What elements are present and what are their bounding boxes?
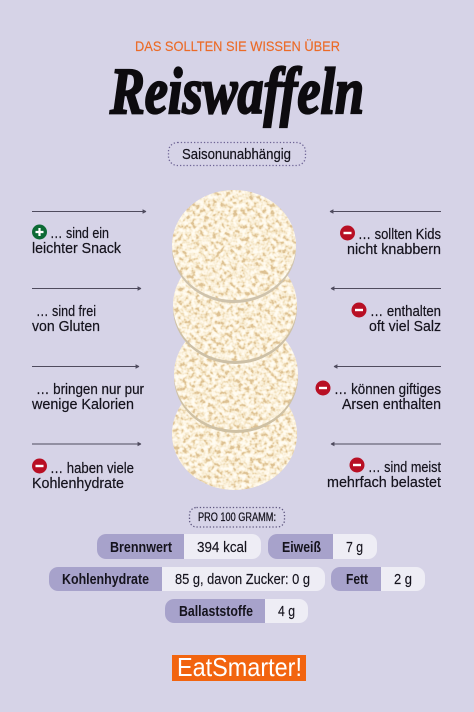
icon: minus [316, 380, 330, 396]
nutrition: Fett: 2 g [394, 571, 412, 588]
nutrition: Kohlenhydrate: 85 g, davon Zucker: 0 g [175, 571, 310, 588]
benefit: gluten free: von Gluten [32, 318, 100, 335]
logo: EatSmarter: EatSmarter! [177, 652, 302, 682]
arrow left 3 [32, 365, 139, 368]
benefit: few calories [31, 381, 144, 413]
drawback: arsenic: … können giftiges [334, 381, 441, 398]
benefit: few calories: … bringen nur pur [36, 381, 144, 398]
rice cake 4 [172, 404, 297, 490]
arrow right 4 [331, 442, 441, 446]
title: Reiswaffeln [109, 55, 364, 128]
drawback: salt [352, 302, 441, 335]
nutrition: Brennwert: Brennwert [110, 540, 172, 556]
nutrition: Eiweiß: 7 g [346, 539, 363, 556]
benefit: light snack: leichter Snack [32, 240, 121, 257]
kicker: DAS SOLLTEN SIE WISSEN ÜBER [135, 37, 340, 54]
drawback: salt: oft viel Salz [369, 318, 441, 335]
icon: minus [350, 458, 364, 472]
rice cake 3 [174, 340, 298, 433]
nutrition: Fett [331, 567, 425, 591]
badge: per 100 gram: PRO 100 GRAMM: [198, 512, 276, 524]
rice cake 1 [170, 188, 298, 303]
drawback: contaminated: mehrfach belastet [327, 474, 442, 491]
illustration: stacked rice cakes [170, 188, 300, 492]
nutrition: Ballaststoffe: Ballaststoffe [179, 604, 253, 620]
arrow left 2 [32, 287, 141, 290]
nutrition: Kohlenhydrate [49, 567, 325, 591]
nutrition: Kohlenhydrate: Kohlenhydrate [62, 572, 149, 588]
drawback: carbohydrates: Kohlenhydrate [32, 475, 124, 492]
icon: plus [32, 224, 47, 240]
arrow right 3 [334, 365, 441, 368]
drawback: kids: … sollten Kids [358, 226, 441, 243]
badge: season [168, 142, 306, 166]
drawback: kids: nicht knabbern [347, 241, 441, 258]
nutrition: Eiweiß: Eiweiß [282, 540, 321, 556]
drawback: contaminated [327, 458, 442, 491]
arrow left 1 [32, 210, 146, 213]
drawback: carbohydrates [32, 458, 134, 492]
nutrition: Brennwert: 394 kcal [197, 539, 247, 556]
nutrition: Eiweiß [268, 534, 377, 559]
benefit: light snack [32, 224, 121, 257]
rice cake 2 [173, 276, 297, 364]
arrow right 2 [331, 287, 441, 290]
drawback: arsenic: Arsen enthalten [342, 396, 441, 413]
badge: per 100 gram [190, 508, 284, 527]
arrow left 4 [32, 442, 141, 446]
nutrition: Ballaststoffe [165, 599, 308, 623]
badge: season: Saisonunabhängig [182, 146, 291, 163]
nutrition: Brennwert [97, 534, 261, 559]
benefit: few calories: wenige Kalorien [31, 396, 134, 413]
drawback: carbohydrates: … haben viele [50, 460, 134, 477]
arrow right 1 [330, 210, 441, 213]
nutrition: Ballaststoffe: 4 g [278, 603, 295, 620]
benefit: light snack: … sind ein [50, 225, 109, 242]
drawback: arsenic [316, 380, 441, 413]
icon: minus [32, 458, 47, 474]
icon: minus [340, 226, 355, 240]
drawback: salt: … enthalten [370, 303, 441, 320]
drawback: kids [340, 226, 441, 258]
icon: minus [352, 302, 366, 318]
drawback: contaminated: … sind meist [368, 459, 442, 476]
benefit: gluten free: … sind frei [36, 303, 96, 320]
nutrition: Fett: Fett [346, 572, 368, 588]
benefit: gluten free [32, 303, 100, 335]
